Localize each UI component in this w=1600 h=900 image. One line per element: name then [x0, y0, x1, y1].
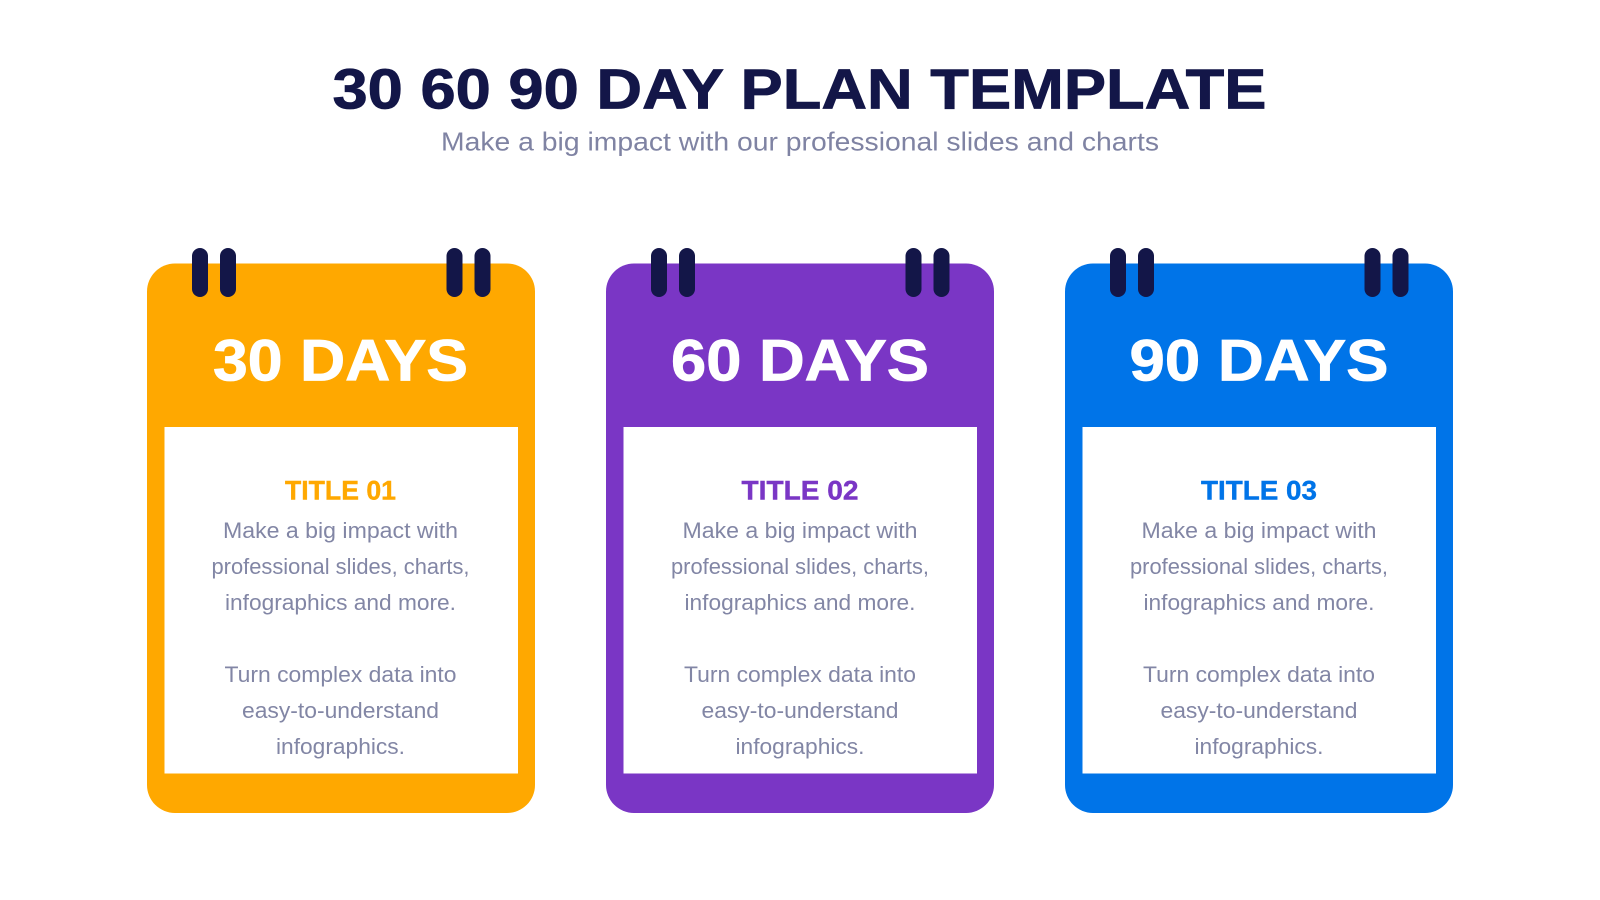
heading: 30 days: 30 DAYS [213, 328, 468, 394]
body text: infographics and more. [684, 590, 916, 615]
content panel [1082, 427, 1436, 774]
subtitle: Make a big impact with our professional slides and charts [441, 126, 1159, 156]
body text: professional slides, charts, [1130, 554, 1388, 579]
card background [147, 264, 535, 813]
icon: calendar binding rings [192, 248, 490, 297]
body text [1130, 518, 1388, 759]
body text: Turn complex data into [1143, 662, 1375, 687]
body text: easy-to-understand [1160, 698, 1358, 723]
body text: infographics. [276, 734, 405, 759]
panel: 90 days calendar card [1065, 248, 1453, 813]
card title: TITLE 02 [742, 476, 858, 506]
body text: infographics and more. [1144, 590, 1374, 615]
content panel [164, 427, 518, 774]
body text: Turn complex data into [684, 662, 916, 687]
body text: Make a big impact with [1142, 518, 1376, 543]
card background [606, 264, 994, 813]
body text: easy-to-understand [702, 698, 898, 723]
panel: 60 days calendar card [606, 248, 994, 813]
body text: Make a big impact with [682, 518, 918, 543]
body text [212, 518, 470, 759]
card title: TITLE 01 [285, 476, 396, 506]
icon: calendar binding rings [1110, 248, 1408, 297]
body text: easy-to-understand [242, 698, 439, 723]
body text: professional slides, charts, [671, 554, 929, 579]
body text: infographics and more. [225, 590, 456, 615]
panel: 30 days calendar card [147, 248, 535, 813]
card background [1065, 264, 1453, 813]
body text: professional slides, charts, [212, 554, 470, 579]
body text: Make a big impact with [223, 518, 458, 543]
icon: calendar binding rings [651, 248, 950, 297]
body text [671, 518, 929, 759]
heading: 60 days: 60 DAYS [671, 328, 929, 394]
body text: infographics. [1194, 734, 1324, 759]
card title: TITLE 03 [1201, 476, 1317, 506]
title: 30 60 90 DAY PLAN TEMPLATE [332, 58, 1266, 122]
content panel [624, 427, 977, 774]
body text: Turn complex data into [224, 662, 456, 687]
heading: 90 days: 90 DAYS [1130, 328, 1388, 394]
body text: infographics. [736, 734, 864, 759]
